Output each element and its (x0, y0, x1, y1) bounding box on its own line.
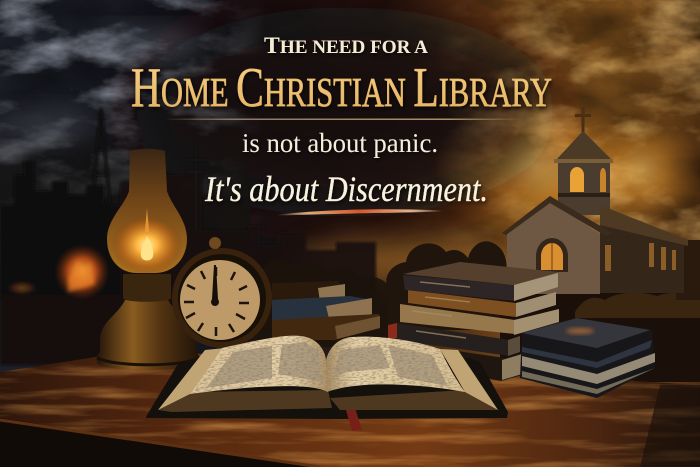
oil lamp (97, 149, 200, 370)
clock (172, 237, 272, 348)
clock hands (212, 265, 218, 299)
bell tower (554, 159, 613, 215)
book 1 (403, 262, 559, 285)
book 5 (450, 350, 522, 381)
glowing arched door (536, 238, 568, 272)
large stack of books at right (388, 262, 559, 381)
lamp collar (123, 274, 171, 302)
subheading: is not about panic: is not about panic. (242, 128, 438, 158)
tree silhouettes and hazy horizon (230, 240, 700, 382)
fires in the burning city (6, 244, 110, 300)
right page (326, 336, 465, 392)
dark city skyline with towers (0, 108, 376, 365)
page edges (158, 390, 498, 412)
stone front wall (507, 202, 600, 294)
clock numerals (184, 267, 249, 336)
steeple roof (556, 131, 612, 160)
book 4 (397, 323, 510, 356)
cover (146, 358, 508, 419)
heading line: The need for a: THE NEED FOR A (264, 33, 429, 58)
nave side (600, 205, 688, 293)
flame (111, 208, 183, 275)
table (0, 345, 700, 467)
church (502, 107, 688, 294)
small stack of old books behind the Bible (272, 281, 380, 340)
divider rule (165, 118, 520, 120)
title block (131, 33, 552, 215)
bookmark ribbon (343, 398, 362, 431)
stack of DVD cases (520, 318, 655, 398)
main heading: Home Christian Library: HOME CHRISTIAN LIBRARY (131, 57, 552, 119)
icon: cross on steeple (575, 107, 591, 132)
book 2 (408, 290, 516, 317)
underline swoosh (277, 210, 442, 215)
book 3 (400, 304, 515, 334)
left page (190, 336, 328, 394)
glass chimney (107, 149, 187, 273)
open Bible (146, 330, 508, 431)
gable roof (502, 196, 612, 236)
lamp base (97, 300, 200, 370)
emphasis line: It's about Discernment: It's about Discernment. (204, 169, 488, 209)
